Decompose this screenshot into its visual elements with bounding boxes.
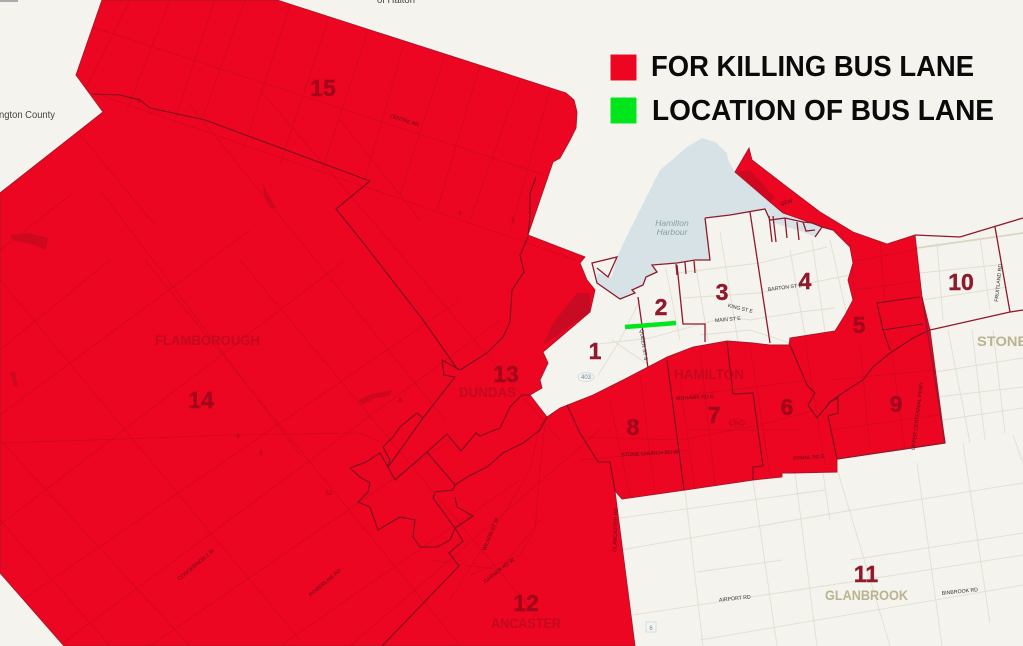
outside region labels: ngton County xyxy=(0,110,55,121)
road labels: AIRPORT RD xyxy=(719,594,751,604)
route shields xyxy=(137,99,745,632)
road labels: KING ST E xyxy=(727,303,754,315)
Hamilton Harbour water: Harbour xyxy=(657,227,689,237)
place names xyxy=(155,332,1023,631)
route shields: 5 xyxy=(511,218,515,224)
route shields: 403 xyxy=(581,375,592,381)
ward numbers: 5 xyxy=(853,312,866,338)
green line: location of bus lane xyxy=(625,323,676,327)
road labels: CENTRE RD xyxy=(389,114,420,129)
ward numbers xyxy=(188,75,974,616)
road labels: QUEEN ST S xyxy=(638,329,648,361)
legend xyxy=(610,51,994,127)
ward numbers: 12 xyxy=(513,590,539,616)
legend text: location of bus lane: LOCATION OF BUS LANE xyxy=(652,95,994,127)
water and conservation patches in red xyxy=(10,170,775,405)
ward numbers: 6 xyxy=(781,394,793,420)
central ward boundaries and coast xyxy=(592,209,1023,459)
road labels: UPPER CENTENNIAL PKWY xyxy=(911,381,925,450)
ward numbers: 7 xyxy=(708,402,720,428)
place names: FLAMBOROUGH xyxy=(155,332,260,348)
ward numbers: 3 xyxy=(716,279,728,305)
legend swatch: green xyxy=(610,97,637,124)
ward numbers: 9 xyxy=(890,391,902,417)
road labels: MOHAWK RD E xyxy=(676,394,714,402)
outside region labels xyxy=(0,0,415,121)
ward numbers: 2 xyxy=(655,294,667,320)
ward numbers: 4 xyxy=(799,268,812,294)
legend swatch: red xyxy=(610,54,637,81)
route shields: 6 xyxy=(458,211,462,217)
road labels: WILSON ST W xyxy=(482,517,500,552)
route shields: LINC xyxy=(730,421,745,427)
road labels: MAIN ST E xyxy=(715,316,742,324)
road labels: GLANCASTER RD xyxy=(612,508,620,552)
ward boundaries xyxy=(92,94,930,646)
ward numbers: 1 xyxy=(589,338,602,364)
route shields: 6 xyxy=(649,626,653,632)
road labels xyxy=(177,114,1004,604)
road labels: POWERLINE RD xyxy=(308,568,343,598)
ward numbers: 10 xyxy=(948,269,974,295)
legend text: for killing bus lane: FOR KILLING BUS LANE xyxy=(651,51,974,83)
route shields: 8 xyxy=(398,398,402,404)
ward numbers: 13 xyxy=(493,361,519,387)
road labels: BARTON ST E xyxy=(767,283,803,293)
route shields: 52 xyxy=(326,491,333,497)
ward numbers: 15 xyxy=(310,75,336,101)
place names: DUNDAS xyxy=(459,384,516,400)
route shields: 6 xyxy=(137,99,141,105)
road labels: GARNER RD W xyxy=(483,557,516,585)
route shields: 5 xyxy=(259,451,263,457)
Hamilton Harbour water xyxy=(597,138,822,299)
route shields: 8 xyxy=(236,434,240,440)
ward numbers: 8 xyxy=(627,414,640,440)
ward numbers: 14 xyxy=(188,387,214,413)
place names: ANCASTER xyxy=(491,615,561,631)
road labels: QEW xyxy=(780,199,794,208)
place names: HAMILTON xyxy=(674,366,744,382)
road labels: CONCESSION 2 W xyxy=(177,548,216,582)
road labels: BINBROOK RD xyxy=(942,587,979,597)
road labels: RYMAL RD E xyxy=(793,454,825,462)
harbour label: Hamilton xyxy=(655,218,689,228)
road labels: FRUITLAND RD xyxy=(994,263,1004,302)
ward numbers: 11 xyxy=(854,561,878,587)
road labels: STONE CHURCH RD W xyxy=(621,450,679,458)
road grid in white wards xyxy=(590,232,1023,646)
place names: GLANBROOK xyxy=(825,587,908,603)
highway in ward 10 xyxy=(917,233,1023,248)
